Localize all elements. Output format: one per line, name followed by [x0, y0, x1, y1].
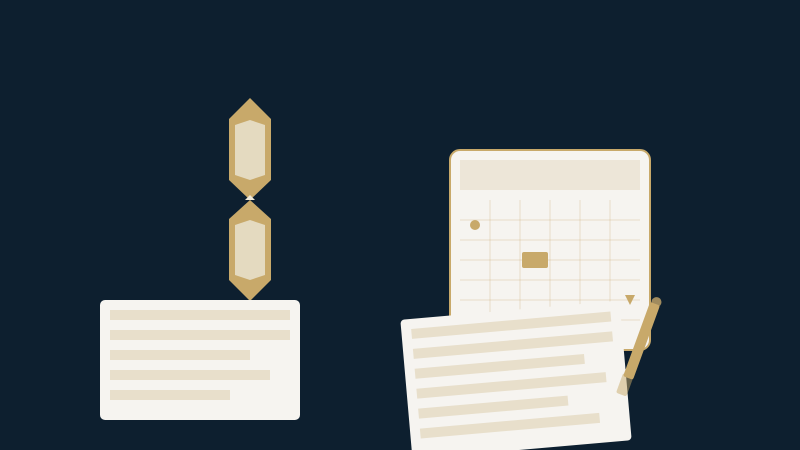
pen body [623, 302, 660, 380]
pen cap [650, 296, 663, 309]
pen tip [616, 373, 634, 397]
calendar dot marker [470, 220, 480, 230]
panel: calendar [450, 150, 650, 350]
hourglass top bulb [229, 98, 271, 200]
panel: left text card [100, 300, 300, 420]
icon: hourglass [229, 98, 271, 301]
hourglass falling sand [245, 195, 255, 200]
calendar highlighted date [522, 252, 548, 268]
panel: tilted note paper [400, 301, 632, 450]
calendar triangle marker [625, 295, 635, 305]
calendar grid [460, 200, 640, 340]
calendar header band [460, 160, 640, 190]
icon: pen [616, 295, 663, 397]
hourglass bottom bulb [229, 200, 271, 301]
